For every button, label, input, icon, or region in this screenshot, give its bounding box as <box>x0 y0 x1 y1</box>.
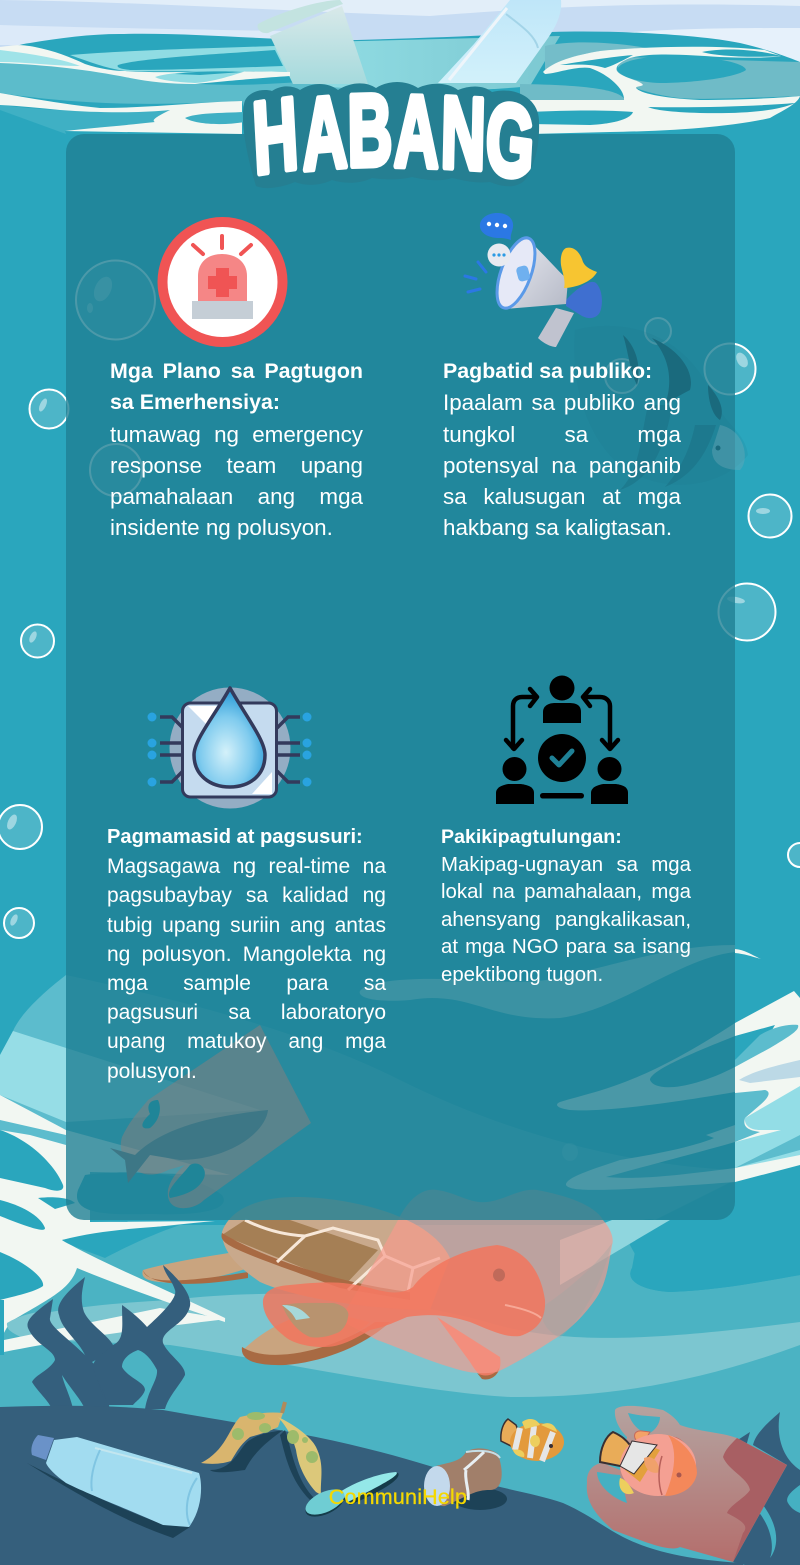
text block: informing the public: hakbang sa kaligtasan. <box>443 515 672 540</box>
text block: emergency response plans: response team upang <box>110 453 363 478</box>
large clownfish <box>600 1431 697 1496</box>
text block: collaboration: epektibong tugon. <box>441 964 603 986</box>
lower right waves <box>560 949 800 1292</box>
bubbles <box>0 260 800 1161</box>
text block: emergency response plans: pamahalaan ang mga <box>110 484 363 509</box>
icon: water drop sensor <box>148 688 312 808</box>
text block: informing the public: tungkol sa mga <box>443 422 681 447</box>
plastic bag on turtle <box>263 1190 613 1373</box>
seafloor <box>0 1406 743 1565</box>
text block: monitoring and analysis <box>107 826 386 1083</box>
text block: monitoring and analysis: polusyon. <box>107 1060 197 1083</box>
white wisps behind panel <box>360 945 735 1190</box>
title: HABANG <box>250 73 537 201</box>
text block: emergency response plans: tumawag ng emergency <box>110 422 363 447</box>
text block: collaboration: at mga NGO para sa isang <box>441 936 691 958</box>
surface foam right <box>530 47 800 134</box>
text block: collaboration: Pakikipagtulungan: <box>441 826 622 848</box>
crushed can <box>424 1448 507 1510</box>
icon: emergency siren <box>158 217 288 347</box>
speech bubble blue <box>480 213 513 240</box>
text block: monitoring and analysis: Magsagawa ng real-time na <box>107 855 386 878</box>
text block: informing the public: potensyal na panganib <box>443 453 681 478</box>
surface foam left <box>0 45 290 134</box>
text block: collaboration: ahensyang pangkalikasan, <box>441 909 691 931</box>
icon: collaboration people <box>496 676 628 804</box>
text block: monitoring and analysis: pagsusuri sa laboratoryo <box>107 1001 386 1024</box>
text block: collaboration <box>441 826 691 986</box>
text block: emergency response plans: insidente ng polusyon. <box>110 515 333 540</box>
text block: monitoring and analysis: upang matukoy ang mga <box>107 1030 386 1053</box>
text block: collaboration: lokal na pamahalaan, mga <box>441 881 691 903</box>
plastic bag on right <box>587 1406 787 1562</box>
text block: informing the public: Ipaalam sa publiko ang <box>443 390 681 415</box>
text block: monitoring and analysis: pagsubaybay sa kalidad ng <box>107 884 386 907</box>
turtle <box>142 1197 500 1379</box>
dark blob lower left behind panel <box>77 1172 224 1214</box>
text block: monitoring and analysis: Pagmamasid at pagsusuri: <box>107 826 363 848</box>
lower left waves <box>0 975 800 1565</box>
text block: informing the public: sa kalusugan at mga <box>443 484 681 509</box>
text block: monitoring and analysis: mga sample para sa <box>107 972 386 995</box>
bag and fish visible through panel <box>110 1025 311 1208</box>
text block: informing the public: Pagbatid sa publiko: <box>443 359 652 383</box>
background: sky <box>0 0 800 75</box>
surface light water right <box>520 42 800 102</box>
text block: emergency response plans <box>110 359 363 540</box>
panel <box>66 134 735 1220</box>
icon: megaphone <box>465 213 602 347</box>
small clownfish <box>501 1419 564 1461</box>
seaweed left <box>27 1265 190 1409</box>
floating bottle <box>438 0 561 83</box>
plastic bottle on seafloor <box>27 1435 201 1538</box>
fish visible through panel <box>574 326 748 490</box>
banana peel <box>201 1402 322 1500</box>
brand name: CommuniHelp <box>329 1485 467 1509</box>
surface light water left <box>0 36 560 134</box>
text block: monitoring and analysis: ng polusyon. Mangolekta ng <box>107 943 386 966</box>
plastic spoon <box>302 1472 399 1522</box>
text block: emergency response plans: sa Emerhensiya: <box>110 390 280 414</box>
text block: monitoring and analysis: tubig upang suriin ang antas <box>107 914 386 937</box>
text block: informing the public <box>443 359 681 540</box>
seaweed right <box>730 1412 800 1565</box>
text block: emergency response plans: Mga Plano sa Pagtugon <box>110 359 363 383</box>
text block: collaboration: Makipag-ugnayan sa mga <box>441 854 691 876</box>
title backing shape <box>243 82 539 188</box>
floating cup <box>257 0 368 84</box>
